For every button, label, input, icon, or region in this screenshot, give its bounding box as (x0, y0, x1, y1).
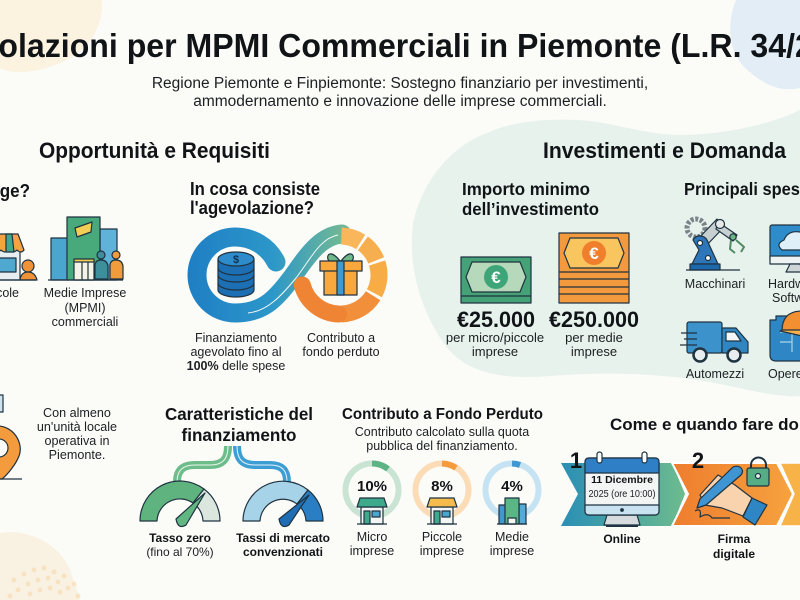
connector: blue (237, 446, 287, 482)
label: unità locale: Con almeno (43, 406, 111, 420)
text: contributo calcolato: pubblica del finanziamento. (366, 439, 518, 453)
icon: blueprint and hard hat (770, 311, 800, 361)
icon: calendar monitor (585, 452, 659, 526)
label: tassi di mercato (236, 531, 330, 559)
arrow: step 2 (672, 463, 793, 526)
label: finanziamento: agevolato fino al (190, 345, 282, 359)
label: tassi di mercato: convenzionati (243, 545, 323, 559)
label: tasso zero: Tasso zero (149, 531, 211, 545)
figure: 250.000 (549, 307, 639, 359)
label: finanziamento: Finanziamento (195, 331, 277, 345)
icon: shop (357, 498, 387, 524)
figure: 25.000: per micro/piccole (446, 330, 544, 345)
label: medie imprese (44, 286, 126, 329)
labels: micro, piccole, medie: Piccole (422, 530, 462, 544)
label: medie imprese: (MPMI) (65, 301, 105, 315)
label: firma digitale (713, 532, 755, 561)
labels: micro, piccole, medie: imprese (350, 544, 394, 558)
background blob: top right (730, 0, 800, 89)
text: contributo calcolato (355, 425, 529, 453)
label: contributo a fondo perduto: fondo perduto (302, 345, 380, 359)
label: tasso zero: (fino al 70%) (146, 545, 214, 559)
label: firma digitale: digitale (713, 547, 755, 561)
label: finanziamento: 100% delle spese (187, 359, 285, 373)
heading: importo minimo (462, 179, 599, 219)
labels: micro, piccole, medie: imprese (420, 544, 464, 558)
label: contributo a fondo perduto (302, 331, 380, 359)
subtitle: ammodernamento e innovazione delle imprese commerciali. (193, 93, 607, 110)
icon: gift box (320, 254, 362, 295)
icon: hand signing (695, 466, 767, 525)
arrow: step 1 (561, 463, 685, 526)
labels: micro, piccole, medie: imprese (490, 544, 534, 558)
icon: green banknote (461, 257, 531, 303)
label: tasso zero (146, 531, 214, 559)
label: unità locale (37, 406, 117, 462)
label: unità locale: Piemonte. (49, 448, 105, 462)
icon: truck (680, 322, 748, 362)
label: medie imprese: Medie Imprese (44, 286, 126, 300)
icon: monitor cloud (770, 225, 800, 272)
icon: shop (427, 498, 457, 524)
label: automezzi: Automezzi (686, 367, 744, 381)
subtitle (152, 75, 648, 110)
number: 1: 1 (570, 448, 582, 473)
heading: opportunità e requisiti: Opportunità e Requisiti (39, 138, 270, 163)
icon: building (497, 498, 527, 524)
heading: in cosa consiste: In cosa consiste (190, 179, 320, 199)
icon: padlock (747, 458, 769, 486)
icon: coin stack: $ (233, 254, 239, 266)
icon: piccole imprese shop (0, 234, 37, 280)
labels: micro, piccole, medie (350, 530, 534, 558)
icon: coin stack (218, 252, 254, 297)
arrow: step 3 (780, 463, 800, 526)
heading: importo minimo: Importo minimo (462, 179, 590, 199)
ring: medie 4%: 4% (501, 478, 523, 495)
text: date: 11 Dicembre (591, 474, 653, 486)
figure: 250.000: imprese (571, 344, 617, 359)
background blob: top left (0, 0, 102, 72)
heading: investimenti e domanda: Investimenti e Domanda (543, 138, 786, 163)
icon: blue ribbon loop (197, 234, 342, 313)
ring: piccole 8%: 8% (431, 478, 453, 495)
ring: micro 10% (346, 464, 398, 524)
icon: orange banknote stack (559, 233, 629, 303)
icon: robot arm (686, 219, 744, 270)
ring: medie 4% (486, 464, 538, 524)
icon: location pin with building (0, 395, 22, 479)
labels: micro, piccole, medie: Micro (357, 530, 387, 544)
icon: medie imprese building (48, 217, 123, 280)
icon: ribbon highlight (248, 235, 338, 313)
figure: 250.000: per medie (565, 330, 623, 345)
background blob: bottom left (0, 532, 80, 600)
figure: 25.000: imprese (472, 344, 518, 359)
heading: in cosa consiste: l'agevolazione? (190, 198, 314, 218)
icon: green banknote: € (491, 268, 501, 287)
label: contributo a fondo perduto: Contributo a (307, 331, 375, 345)
labels: micro, piccole, medie: Medie (495, 530, 529, 544)
figure: 25.000 (446, 307, 544, 359)
heading: caratteristiche del finanziamento: Caratteristiche del (165, 404, 313, 424)
icon: orange ring segments (302, 236, 379, 314)
panel background: investimenti e domanda (412, 110, 800, 396)
text: date: 2025 (ore 10:00) (588, 489, 656, 500)
label: medie imprese: commerciali (52, 315, 118, 329)
figure: 25.000: €25.000 (457, 307, 535, 332)
chart: infinity diagram (197, 234, 379, 314)
heading: caratteristiche del finanziamento: finanziamento (182, 425, 296, 445)
label: online: Online (603, 532, 641, 546)
label: firma digitale: Firma (718, 532, 751, 546)
label: hardware software (768, 277, 800, 305)
label: unità locale: operativa in (44, 434, 110, 448)
figure: 250.000: €250.000 (549, 307, 639, 332)
heading: importo minimo: dell’investimento (462, 199, 599, 219)
gauge: tassi di mercato (243, 481, 323, 527)
text: contributo calcolato: Contributo calcolato sulla quota (355, 425, 529, 439)
ring: micro 10%: 10% (357, 478, 387, 495)
number: 2: 2 (692, 448, 704, 473)
text: date (588, 474, 656, 500)
label: unità locale: un'unità locale (37, 420, 117, 434)
subtitle: Regione Piemonte e Finpiemonte: Sostegno finanziario per investimenti, (152, 75, 648, 92)
ring: piccole 8% (416, 464, 468, 524)
label: macchinari: Macchinari (685, 277, 745, 291)
heading: in cosa consiste (190, 179, 320, 218)
icon: orange banknote stack: € (589, 244, 599, 263)
heading: caratteristiche del finanziamento (165, 404, 313, 445)
gauge: tasso zero (140, 481, 220, 527)
label: tassi di mercato: Tassi di mercato (236, 531, 330, 545)
connector: green (177, 446, 228, 482)
heading: contributo a fondo perduto: Contributo a Fondo Perduto (342, 406, 543, 423)
label: finanziamento (187, 331, 285, 373)
